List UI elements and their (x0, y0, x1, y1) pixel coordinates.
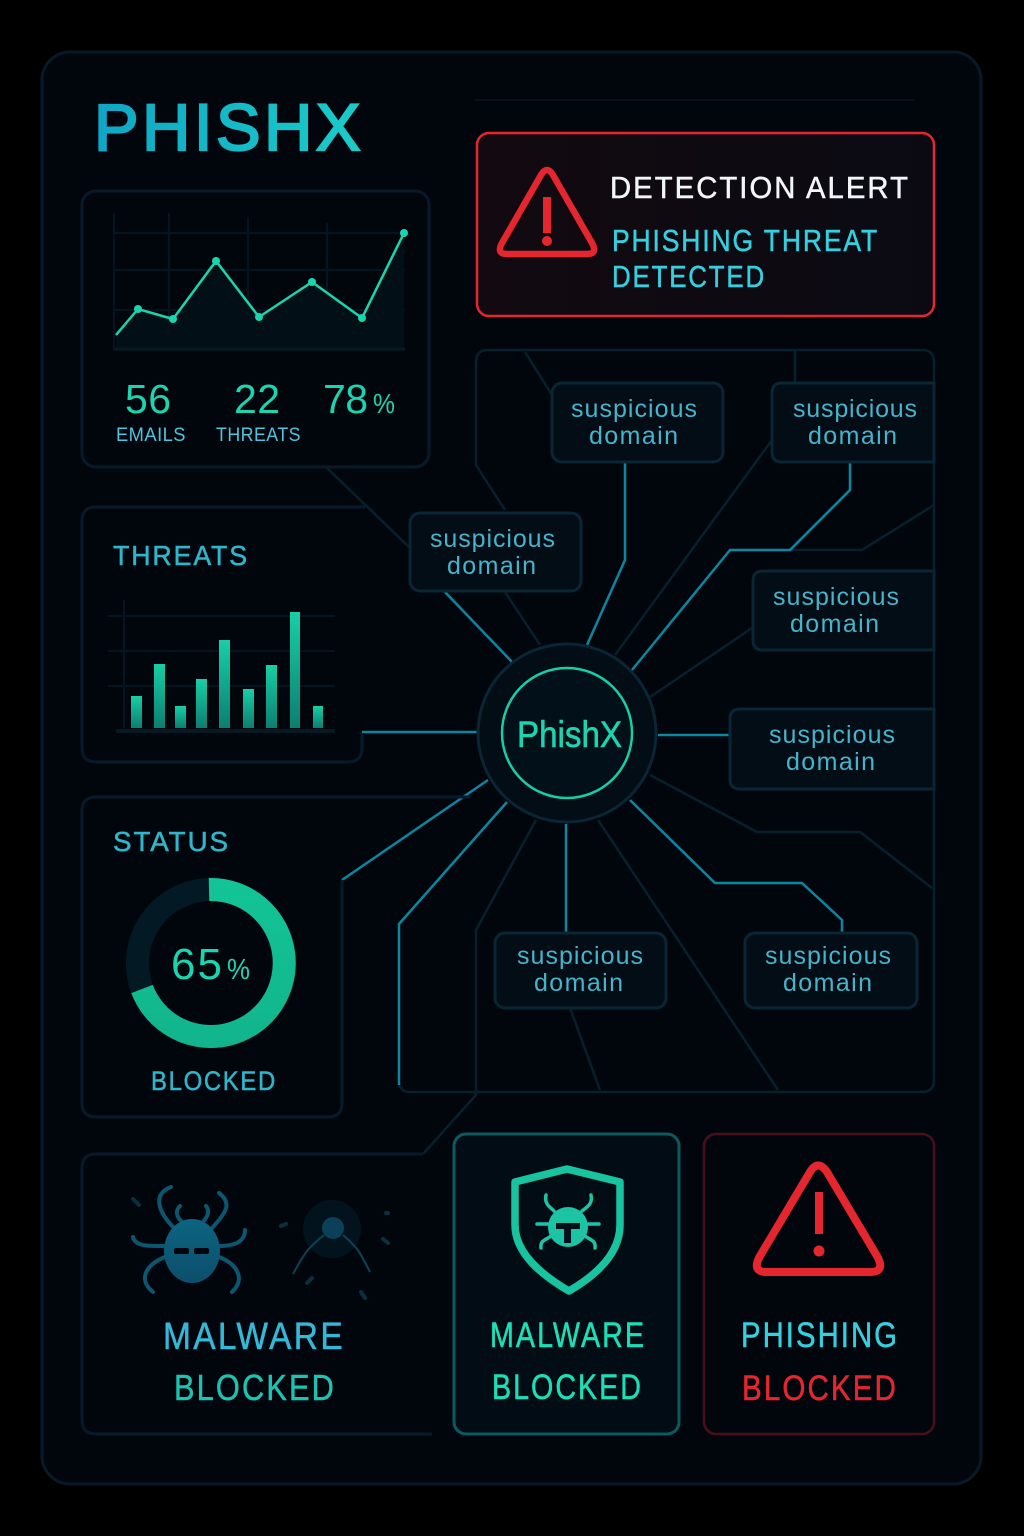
node: suspicious domain 5 (730, 709, 934, 789)
stat: emails (116, 376, 186, 446)
node: suspicious domain 7: suspicious (765, 942, 891, 970)
panel: network outline and connectors (327, 350, 934, 1154)
stat: threats: 22 (234, 376, 280, 422)
central PhishX hub (478, 644, 656, 822)
node: suspicious domain 2 (772, 383, 934, 462)
stat: threats: THREATS (216, 425, 301, 446)
panel: chart and stats (82, 191, 429, 467)
card label: BLOCKED (492, 1368, 643, 1407)
stat: threats (216, 376, 301, 446)
node: suspicious domain 7: domain (783, 969, 872, 997)
threats heading: THREATS (113, 540, 249, 571)
card: malware blocked shield (454, 1134, 679, 1434)
panel: threats bar chart (82, 507, 365, 762)
icon: faded bug fragment (133, 1199, 388, 1298)
node: suspicious domain 3: domain (447, 552, 536, 580)
panel: detection alert (477, 133, 934, 316)
line chart (113, 213, 408, 349)
card: phishing blocked (704, 1134, 934, 1434)
donut chart: % (227, 954, 250, 986)
donut chart: 65 (171, 940, 222, 989)
icon: bug (133, 1187, 245, 1292)
node: suspicious domain 7 (745, 933, 917, 1008)
node: suspicious domain 5: suspicious (769, 721, 895, 749)
card label: BLOCKED (742, 1369, 898, 1408)
node: suspicious domain 2: suspicious (793, 395, 917, 423)
node: suspicious domain 4: domain (790, 610, 879, 638)
alert heading: DETECTION ALERT (610, 170, 910, 205)
alert message: DETECTED (612, 259, 766, 294)
stat: emails: EMAILS (116, 425, 186, 446)
stat: emails: 56 (125, 376, 171, 422)
node: suspicious domain 5: domain (786, 748, 875, 776)
node: suspicious domain 4 (753, 571, 934, 650)
node: suspicious domain 3: suspicious (430, 525, 555, 553)
node: suspicious domain 1 (552, 383, 723, 462)
panel: malware blocked with bug icons: BLOCKED (174, 1367, 336, 1408)
stat: percentage: % (373, 388, 395, 419)
icon: warning triangle (757, 1166, 880, 1272)
node: suspicious domain 4: suspicious (773, 583, 899, 611)
central PhishX hub: PhishX (517, 714, 622, 755)
status heading: STATUS (113, 826, 230, 857)
node: suspicious domain 1: suspicious (571, 395, 697, 423)
panel: status donut (82, 797, 470, 1117)
title: PHISHX (94, 90, 364, 164)
donut label: BLOCKED (151, 1066, 277, 1096)
alert message: PHISHING THREAT (612, 223, 879, 258)
card label (490, 1316, 646, 1407)
stat: percentage (323, 376, 395, 422)
node: suspicious domain 6: domain (534, 969, 623, 997)
node: suspicious domain 3 (410, 513, 581, 591)
panel: malware blocked with bug icons (82, 1154, 432, 1434)
card label (741, 1316, 899, 1408)
node: suspicious domain 1: domain (589, 422, 678, 450)
bar chart (108, 600, 335, 733)
node: suspicious domain 6 (495, 933, 666, 1008)
malware blocked label: MALWARE (163, 1316, 345, 1358)
card label: PHISHING (741, 1316, 899, 1355)
donut chart (138, 889, 284, 1036)
node: suspicious domain 2: domain (808, 422, 897, 450)
icon: shield with bug (515, 1169, 620, 1291)
alert message (612, 223, 879, 294)
icon: alert triangle (500, 170, 594, 254)
card label: MALWARE (490, 1316, 646, 1355)
node: suspicious domain 6: suspicious (517, 942, 643, 970)
stat: percentage: 78 (323, 376, 368, 422)
